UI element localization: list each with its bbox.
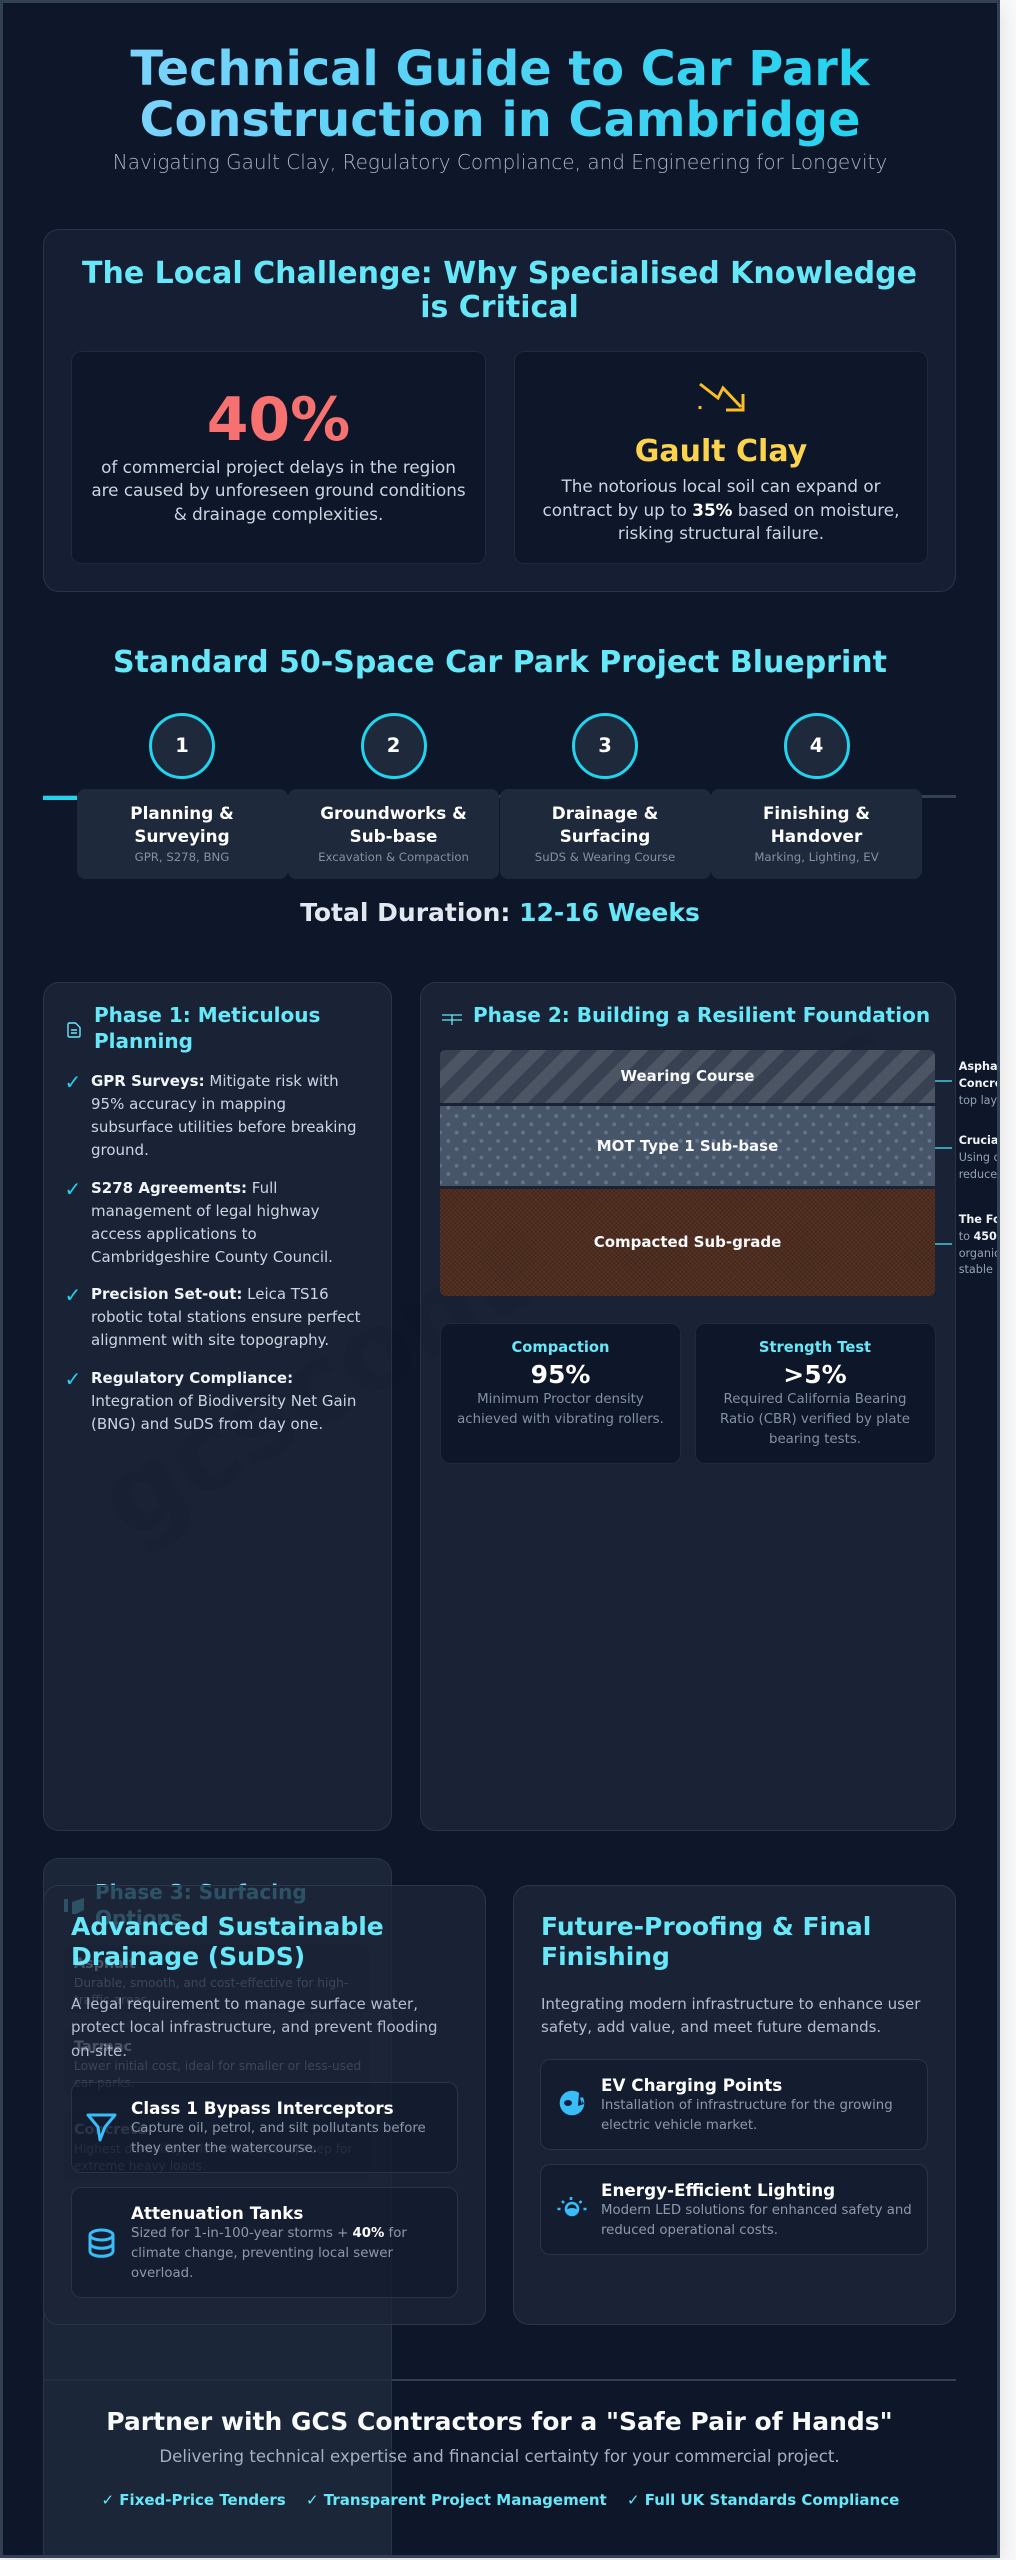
heading: future-proofing (541, 1912, 871, 1971)
future-proofing intro paragraph (541, 1995, 920, 2036)
check item: S278: ✓ (64, 1176, 81, 1200)
step number 2 (360, 713, 426, 779)
heading: local challenge: The Local Challenge: Why Specialised Knowledge (82, 256, 917, 291)
heading: future-proofing: Future-Proofing & Final (541, 1912, 871, 1941)
layer: MOT sub-base (440, 1106, 935, 1186)
heading: phase 3: Options (95, 1906, 183, 1930)
step 1 box: GPR, S278, BNG (135, 850, 229, 864)
heading: project blueprint: Standard 50-Space Car Park Project Blueprint (113, 644, 887, 680)
option: concrete (64, 2111, 370, 2179)
future-proofing intro paragraph: Integrating modern infrastructure to enhance user (541, 1995, 920, 2013)
text: S278 agreements: Cambridgeshire County Council. (91, 1248, 333, 1266)
layer: wearing course (440, 1050, 935, 1103)
icon: funnel (86, 2114, 116, 2142)
heading: phase 1: Planning (94, 1029, 193, 1053)
step 2 box: Excavation & Compaction (318, 850, 469, 864)
card: lighting (540, 2164, 928, 2255)
footer heading: Partner with GCS Contractors for a "Safe Pair of Hands" (106, 2407, 893, 2436)
watermark: gcscontractors (78, 991, 919, 1564)
interceptor description: they enter the watercourse. (131, 2141, 317, 2156)
statistic description (91, 457, 466, 524)
layer: MOT sub-base: MOT Type 1 Sub-base (597, 1137, 778, 1155)
EV description (601, 2098, 893, 2133)
card: bypass interceptors (71, 2082, 458, 2173)
stat card: strength test: Ratio (CBR) verified by plate (720, 1412, 910, 1427)
layer: compacted sub-grade: Compacted Sub-grade (594, 1233, 781, 1251)
future-proofing intro paragraph: safety, add value, and meet future demands. (541, 2018, 881, 2036)
step 4 box: Finishing & (763, 802, 870, 822)
layer: compacted sub-grade (440, 1189, 935, 1296)
text: GPR surveys: ground. (91, 1141, 149, 1159)
text: S278 agreements: S278 Agreements: Full (91, 1178, 277, 1196)
heading: SuDS (71, 1912, 384, 1971)
icon: database tank (88, 2228, 114, 2258)
panel: phase 1 (43, 982, 392, 1831)
lighting description (601, 2203, 912, 2238)
option: tarmac: Lower initial cost, ideal for smaller or less-used (74, 2059, 361, 2073)
option: tarmac: Tarmac (74, 2039, 132, 2055)
text: GPR surveys: GPR Surveys: Mitigate risk with (91, 1072, 339, 1090)
interceptor title: Class 1 Bypass Interceptors (131, 2098, 394, 2118)
lighting description: Modern LED solutions for enhanced safety and (601, 2203, 912, 2218)
option: tarmac (64, 2028, 370, 2096)
SuDS intro paragraph: on-site. (71, 2042, 127, 2060)
statistic description: are caused by unforeseen ground conditions (91, 480, 466, 500)
title: Technical Guide to Car Park (130, 42, 870, 96)
icon: lighting sun (558, 2197, 586, 2216)
heading: phase 1: Phase 1: Meticulous (94, 1003, 320, 1027)
assurance: fixed price: ✓ Fixed-Price Tenders (102, 2491, 286, 2509)
option: asphalt: traffic areas. (74, 1993, 151, 2007)
option: asphalt: Durable, smooth, and cost-effective for high- (74, 1976, 348, 1990)
check item: GPR: ✓ (64, 1070, 81, 1094)
heading: phase 3: Phase 3: Surfacing (95, 1880, 307, 1904)
step number 1 (149, 713, 215, 779)
attenuation title: Attenuation Tanks (131, 2203, 303, 2223)
panel: local challenge (43, 229, 956, 592)
step 1 box (76, 789, 288, 879)
Gault Clay description: contract by up to 35% based on moisture, (543, 500, 899, 520)
title: Construction in Cambridge (139, 93, 861, 148)
Gault Clay description: The notorious local soil can expand or (561, 476, 881, 496)
timeline line (43, 795, 956, 800)
step 2 (288, 713, 499, 879)
option: asphalt (64, 1945, 370, 2013)
callout: sub-grade (958, 1213, 1000, 1276)
interceptor description: Capture oil, petrol, and silt pollutants before (131, 2121, 426, 2136)
attenuation description (131, 2226, 407, 2281)
footer subheading: Delivering technical expertise and financial certainty for your commercial project. (159, 2447, 840, 2466)
option: concrete: extreme heavy loads. (74, 2159, 206, 2173)
text: precision set-out: alignment with site topography. (91, 1331, 329, 1349)
step 2 box (288, 789, 499, 879)
title (120, 44, 880, 146)
step number 4: 4 (810, 734, 823, 757)
step 1 (77, 713, 288, 879)
icon: document (67, 1022, 81, 1038)
text: regulatory compliance: (BNG) and SuDS from day one. (91, 1415, 323, 1433)
step 1 box: Planning & (130, 802, 234, 822)
interceptor description (131, 2121, 426, 2156)
callout: sub-base (959, 1134, 1000, 1181)
stat card: strength test: Required California Bearing (724, 1392, 906, 1407)
assurance: standards compliance: ✓ Full UK Standards Compliance (627, 2491, 899, 2509)
text: regulatory compliance (91, 1368, 356, 1433)
big number 40%: 40% (207, 385, 350, 455)
statistic description: of commercial project delays in the region (101, 457, 456, 477)
heading: phase 2: Phase 2: Building a Resilient Foundation (473, 1003, 930, 1027)
callout: wearing course (958, 1060, 1000, 1107)
statistic description: & drainage complexities. (174, 504, 383, 524)
stat card: compaction: Minimum Proctor density (477, 1392, 644, 1407)
lighting title: Energy-Efficient Lighting (601, 2180, 835, 2200)
panel: phase 3 (43, 1858, 392, 2560)
panel: SuDS drainage (43, 1885, 486, 2325)
card: 40 percent statistic (71, 351, 486, 564)
EV description: Installation of infrastructure for the growing (601, 2098, 893, 2113)
step 3 box: Drainage & (552, 802, 658, 822)
stat card: compaction: achieved with vibrating rollers. (457, 1412, 664, 1427)
layer: wearing course: Wearing Course (620, 1067, 754, 1085)
step number 4 (784, 713, 850, 779)
stat card: strength test: >5% (783, 1360, 847, 1389)
panel: future-proofing (513, 1885, 956, 2325)
text: GPR surveys (91, 1072, 357, 1159)
text: precision set-out: Precision Set-out: Leica TS16 (91, 1284, 329, 1302)
leader line: sub-grade (935, 1243, 952, 1244)
footer divider (43, 2379, 956, 2381)
option: tarmac: car parks. (74, 2076, 135, 2090)
EV description: electric vehicle market. (601, 2118, 757, 2133)
text: S278 agreements: access applications to (91, 1225, 257, 1243)
attenuation description: overload. (131, 2266, 193, 2281)
icon: road layers (442, 1014, 462, 1025)
text: regulatory compliance: Regulatory Compliance: (91, 1368, 293, 1386)
card: EV charging (540, 2059, 928, 2150)
panel: phase 2 (420, 982, 956, 1831)
icon: surfacing (64, 1898, 84, 1914)
step number 2: 2 (387, 734, 400, 757)
step 3 box: SuDS & Wearing Course (535, 850, 675, 864)
subtitle: Navigating Gault Clay, Regulatory Compliance, and Engineering for Longevity (113, 150, 887, 174)
check item: regulatory: ✓ (64, 1366, 81, 1390)
step 1 box: Surveying (134, 826, 230, 846)
SuDS intro paragraph: A legal requirement to manage surface water, (71, 1995, 418, 2013)
footer (102, 2407, 899, 2509)
stat card: strength test (694, 1323, 936, 1464)
step 2 box: Groundworks & (320, 802, 467, 822)
stat card: strength test: Strength Test (759, 1339, 871, 1356)
heading: Gault Clay: Gault Clay (635, 434, 807, 469)
text: precision set-out (91, 1284, 360, 1349)
icon: trending down arrow (698, 382, 744, 412)
step number 1: 1 (175, 734, 189, 757)
step 3 (500, 713, 711, 879)
check item: precision: ✓ (64, 1282, 81, 1306)
text: GPR surveys: 95% accuracy in mapping (91, 1095, 286, 1113)
step 3 box: Surfacing (560, 826, 650, 846)
attenuation description: climate change, preventing local sewer (131, 2246, 393, 2261)
heading: local challenge: is Critical (420, 290, 579, 324)
heading: phase 1 (94, 1003, 320, 1053)
Gault Clay description: risking structural failure. (618, 523, 824, 543)
SuDS intro paragraph (71, 1995, 438, 2060)
stat card: compaction: 95% (531, 1360, 590, 1389)
EV title: EV Charging Points (601, 2075, 782, 2095)
stat card: strength test: bearing tests. (769, 1432, 861, 1447)
heading: future-proofing: Finishing (541, 1942, 670, 1971)
text: S278 agreements (91, 1178, 333, 1266)
step 4 box: Handover (771, 826, 862, 846)
text: precision set-out: robotic total stations ensure perfect (91, 1308, 360, 1326)
text: S278 agreements: management of legal highway (91, 1202, 320, 1220)
text: GPR surveys: subsurface utilities before breaking (91, 1118, 357, 1136)
lighting description: reduced operational costs. (601, 2223, 778, 2238)
total duration: Total Duration: 12-16 Weeks (300, 898, 700, 927)
option: asphalt: Asphalt (74, 1956, 136, 1972)
heading: phase 3 (95, 1880, 307, 1930)
heading: SuDS: Drainage (SuDS) (71, 1942, 305, 1971)
icon: EV charging (560, 2090, 586, 2116)
leader line: wearing course (935, 1080, 952, 1082)
step 4 (711, 713, 922, 879)
option: concrete: Concrete (74, 2122, 147, 2138)
attenuation description: Sized for 1-in-100-year storms + 40% for (131, 2226, 407, 2241)
option: concrete: Highest durability, with the lowest upkeep for (74, 2142, 352, 2156)
card: attenuation tanks (71, 2187, 458, 2298)
stat card: compaction: Compaction (512, 1339, 609, 1356)
heading: local challenge (82, 256, 917, 324)
step number 3: 3 (598, 734, 612, 757)
step 4 box: Marking, Lighting, EV (754, 850, 879, 864)
step 2 box: Sub-base (350, 826, 437, 846)
SuDS intro paragraph: protect local infrastructure, and prevent flooding (71, 2018, 438, 2036)
leader line: sub-base (935, 1147, 952, 1148)
step 3 box (500, 789, 710, 879)
assurance: transparent management: ✓ Transparent Project Management (306, 2491, 607, 2509)
text: regulatory compliance: Integration of Biodiversity Net Gain (91, 1392, 356, 1410)
Gault Clay description (543, 476, 899, 543)
card: Gault Clay (514, 351, 928, 564)
step 4 box (711, 789, 922, 879)
stat card: compaction (440, 1323, 681, 1464)
heading: SuDS: Advanced Sustainable (71, 1912, 384, 1941)
step number 3 (572, 713, 638, 779)
